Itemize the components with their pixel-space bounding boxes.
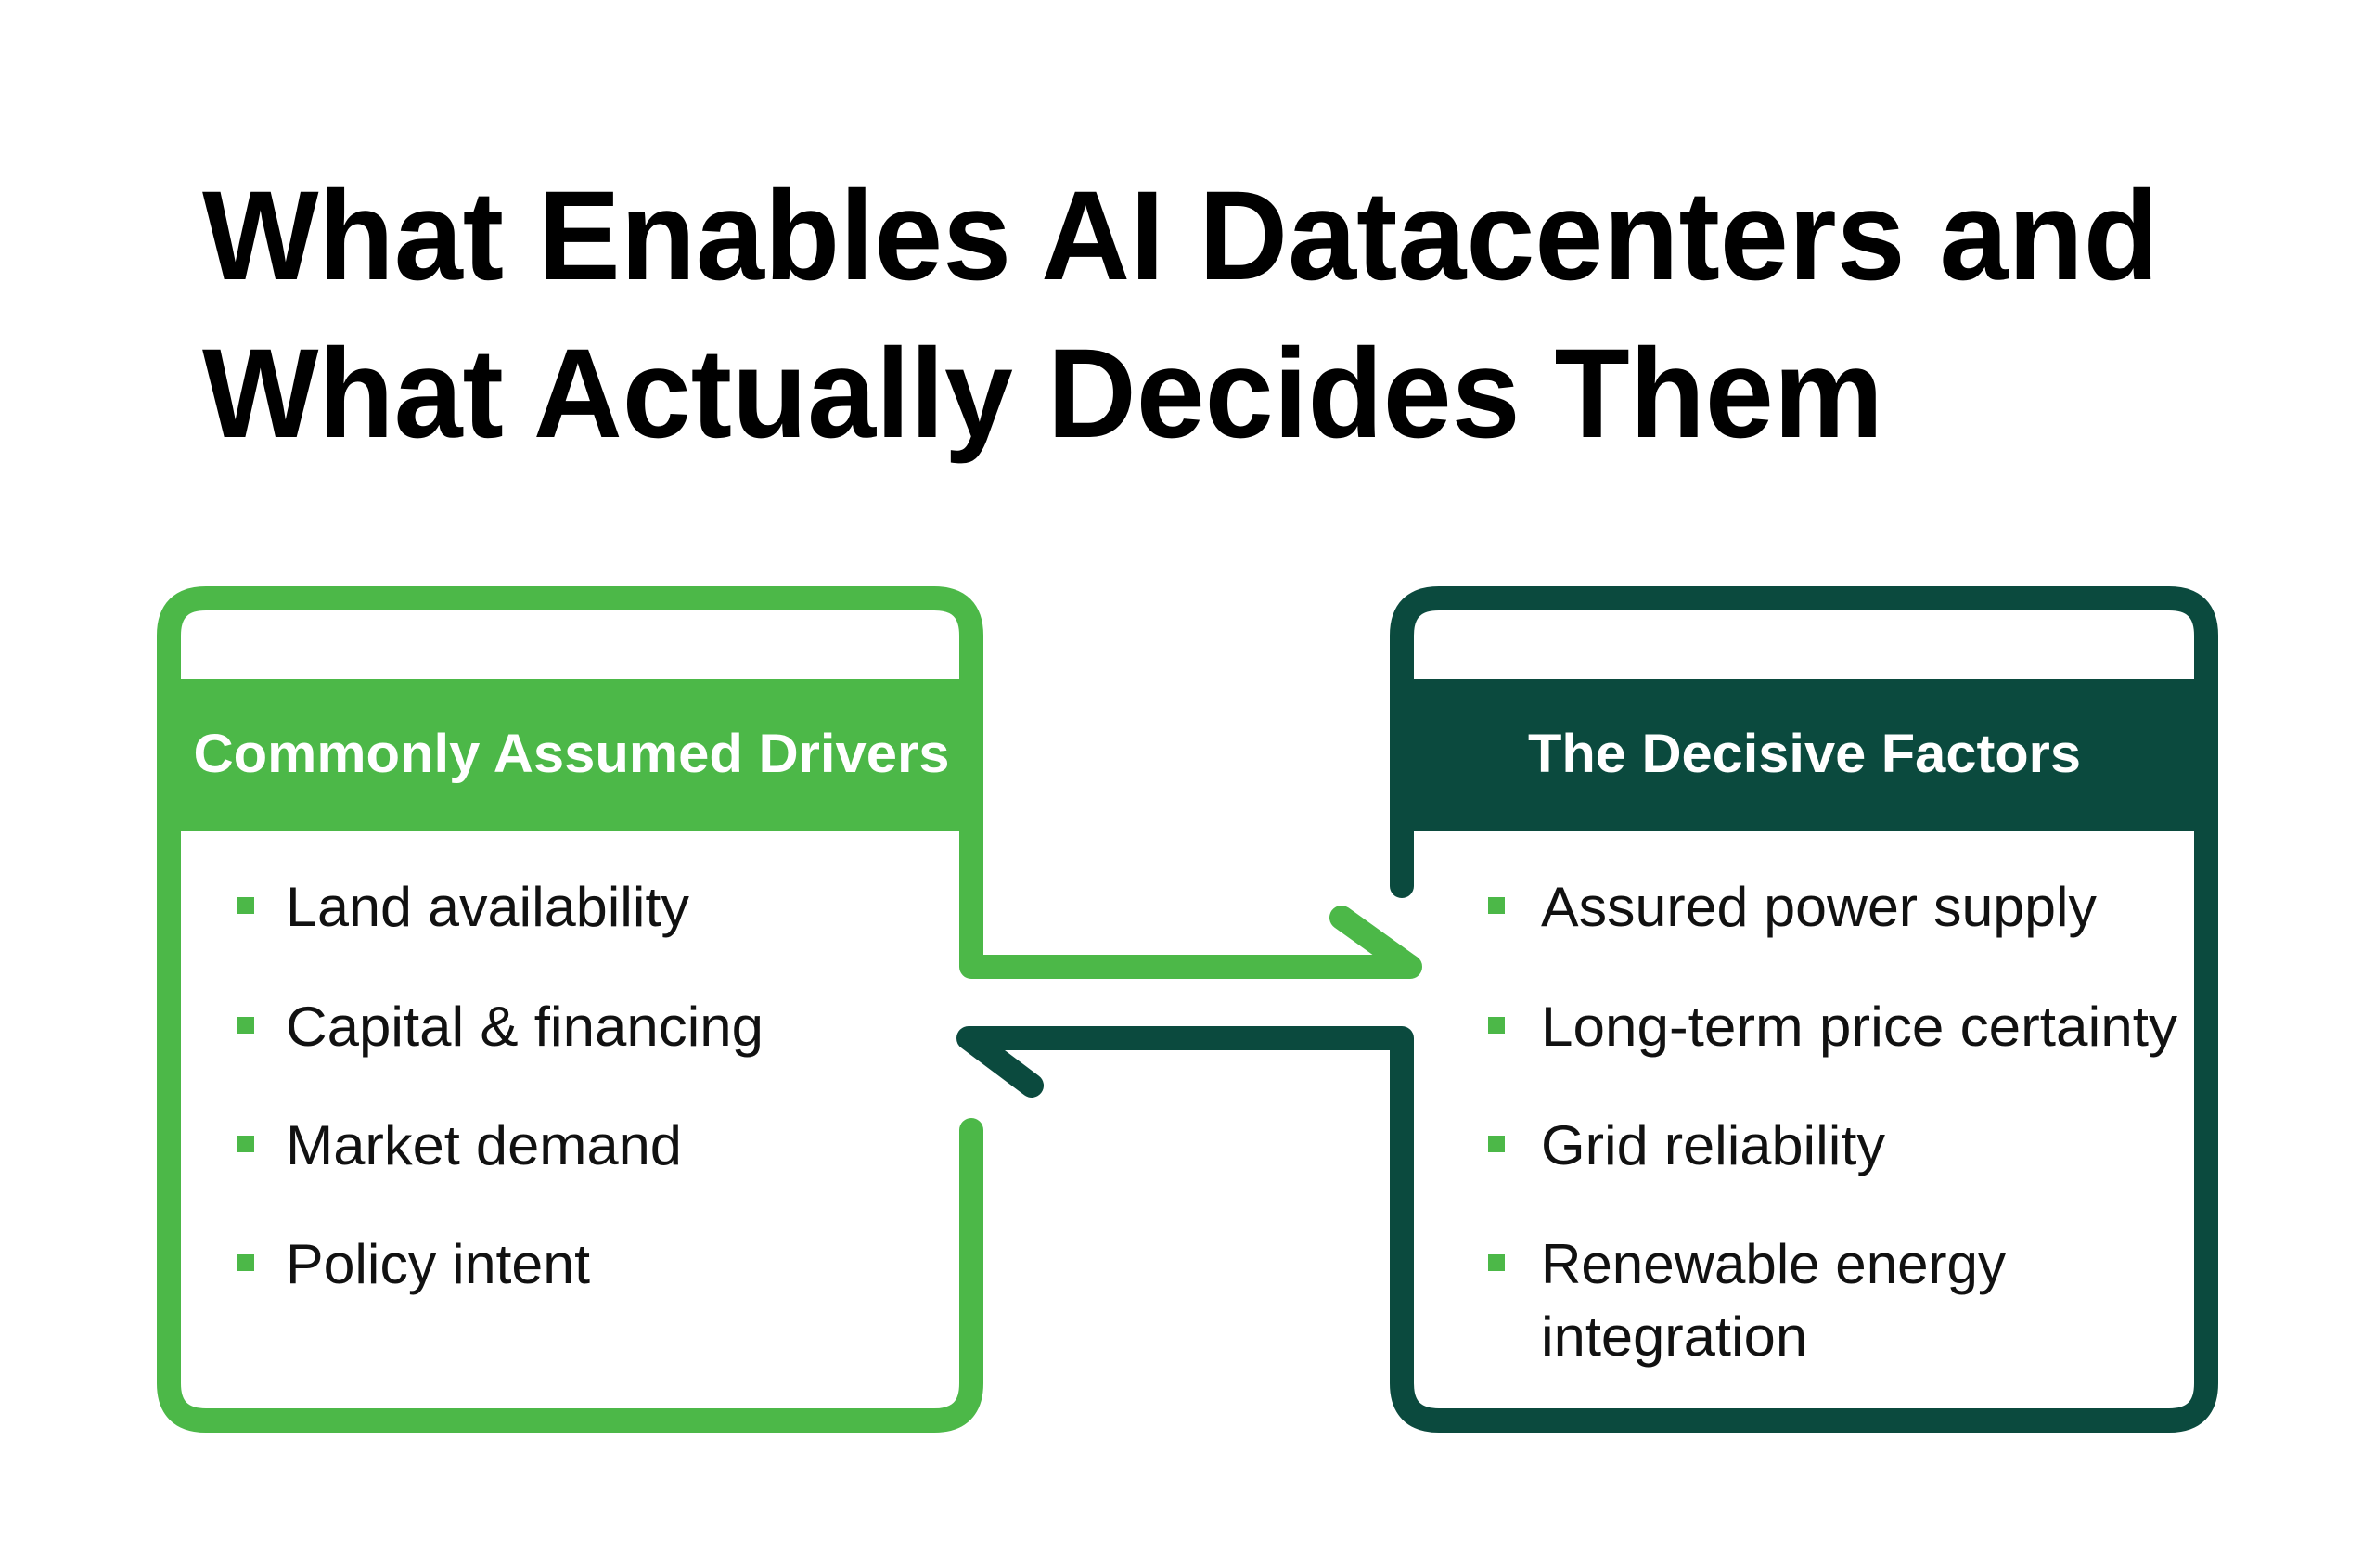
header band: decisive factors (1402, 679, 2206, 831)
panel border + arrow: drivers to decisive factors (169, 598, 1410, 1420)
list: drivers (238, 876, 764, 1295)
list: drivers: Land availability (286, 876, 689, 938)
header band: decisive factors: The Decisive Factors (1528, 724, 2081, 784)
panel: commonly assumed drivers (169, 598, 1410, 1420)
header band: commonly assumed drivers: Commonly Assumed Drivers (193, 724, 949, 784)
list: decisive factors: Assured power supply (1541, 876, 2097, 938)
list: decisive factors: integration (1541, 1305, 1807, 1368)
list: decisive factors: Renewable energy (1541, 1233, 2006, 1295)
list: decisive factors (1488, 876, 2177, 1368)
panel border + arrow: decisive factors back to drivers (969, 598, 2206, 1420)
header band: commonly assumed drivers (169, 679, 971, 831)
list: decisive factors: Long-term price certainty (1541, 996, 2177, 1058)
title: What Enables AI Datacenters and (202, 165, 2159, 307)
list: drivers: Market demand (286, 1114, 682, 1176)
list: decisive factors: Grid reliability (1541, 1114, 1885, 1176)
panel: decisive factors (969, 598, 2206, 1420)
title: What Actually Decides Them (202, 323, 1883, 465)
list: drivers: Policy intent (286, 1233, 590, 1295)
title (202, 165, 2159, 465)
list: drivers: Capital & financing (286, 996, 764, 1058)
